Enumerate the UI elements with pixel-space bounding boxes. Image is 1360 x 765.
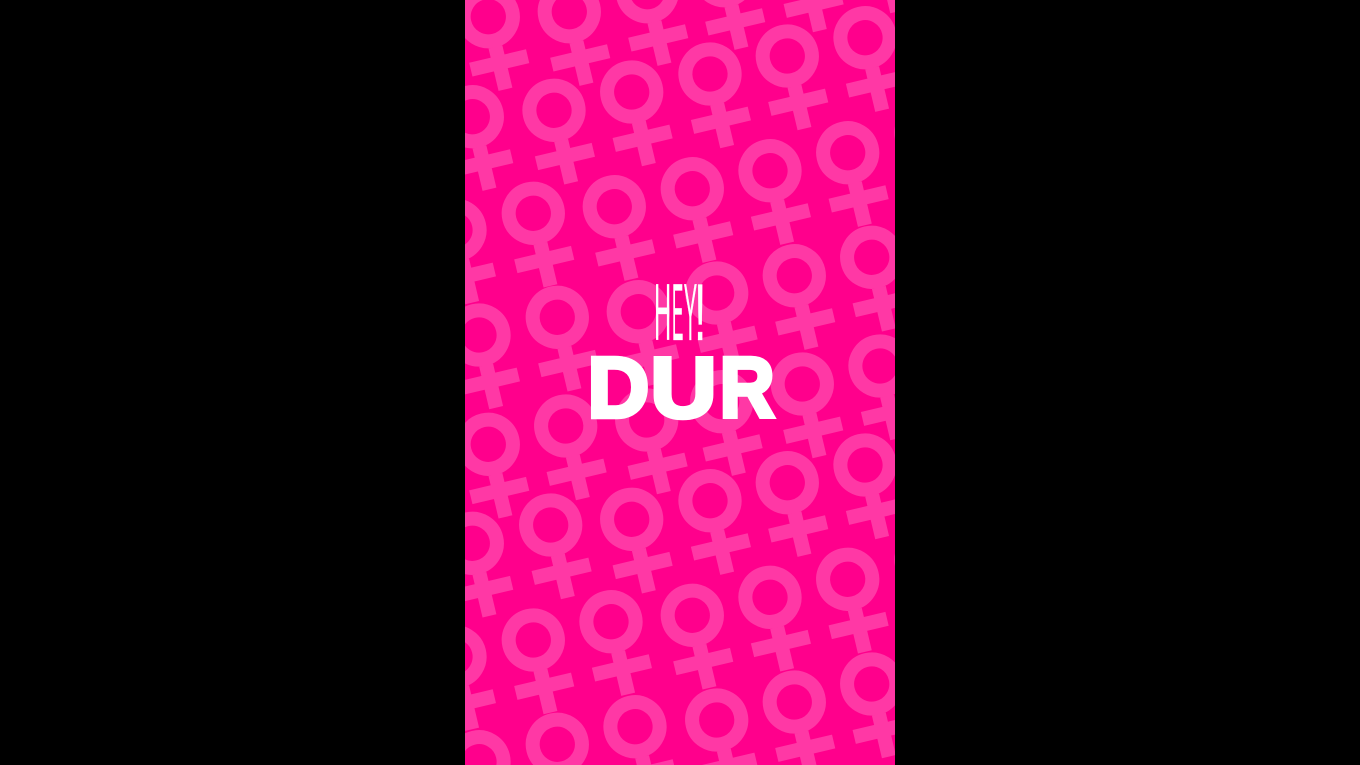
venus symbol pattern	[421, 0, 972, 765]
heading: DUR	[588, 339, 775, 436]
heading: HEY!: H	[654, 267, 671, 358]
heading: HEY!: E	[672, 268, 683, 358]
heading: HEY!: !	[694, 267, 706, 357]
heading: DUR: D	[588, 341, 649, 436]
panel: pink poster	[465, 0, 895, 765]
heading: DUR: U	[650, 339, 717, 435]
heading: HEY!	[654, 267, 706, 358]
heading: DUR: R	[720, 341, 775, 436]
heading: HEY!: Y	[684, 267, 697, 358]
